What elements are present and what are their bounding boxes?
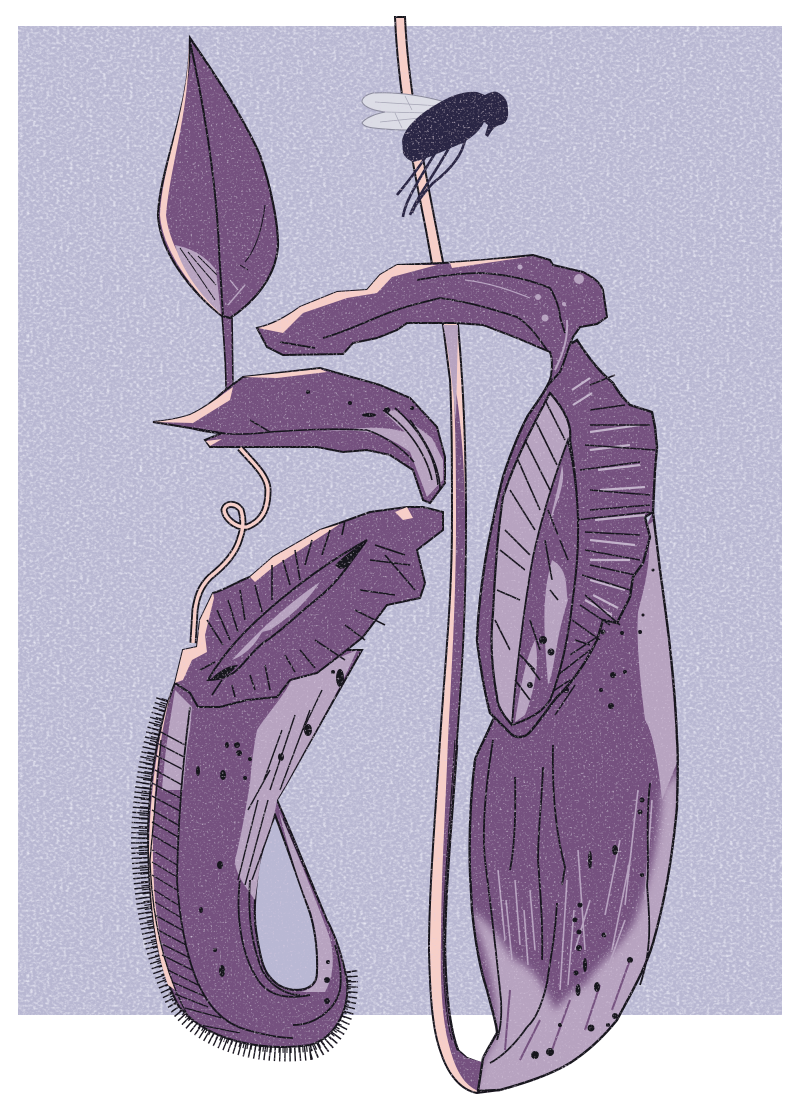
lid spots	[518, 264, 584, 322]
pitcher body	[148, 650, 362, 1047]
light fan at pitcher base	[470, 770, 680, 1100]
mouth	[208, 540, 367, 680]
hollow between twists	[255, 815, 317, 990]
pitcher body	[470, 512, 678, 1091]
plant artwork	[140, 17, 680, 1100]
peristome rim	[477, 340, 657, 737]
central stem	[395, 17, 500, 1093]
rim pink edge	[175, 507, 413, 683]
twist light band	[279, 812, 333, 992]
tendril	[193, 448, 268, 643]
peristome rim	[175, 507, 443, 707]
leaf midrib and hatching	[190, 42, 223, 316]
band hatching	[238, 690, 322, 885]
lower lid speckles	[306, 390, 414, 417]
wing veins	[375, 96, 440, 128]
rim highlights	[572, 378, 645, 615]
inner lines	[177, 707, 341, 1038]
lower lid light band	[317, 410, 443, 497]
fold lines	[484, 740, 650, 1063]
upper-left light patch	[162, 690, 192, 790]
pink edge strip	[149, 692, 175, 990]
top leaf	[158, 38, 278, 318]
leaf pink edge	[160, 44, 222, 315]
mouth inner wall	[512, 440, 578, 725]
light streak on right side	[637, 520, 678, 800]
lower lid lines	[190, 408, 440, 490]
body	[402, 92, 508, 162]
mouth outer	[492, 393, 578, 725]
body outline	[470, 512, 678, 1091]
purple streaks in fan	[505, 960, 630, 1060]
speckles	[531, 568, 654, 1059]
front light band	[235, 650, 357, 900]
mouth dark ends	[210, 541, 366, 680]
lid inner lines	[280, 273, 565, 350]
inner wall light patches	[515, 465, 568, 722]
speckles	[196, 669, 344, 1004]
mouth pale interior	[232, 582, 320, 660]
lower lid pink edge	[153, 369, 327, 446]
leaf light patch	[175, 245, 221, 314]
left band hatching	[150, 730, 240, 1033]
mouth dark hatching	[495, 400, 568, 700]
legs	[397, 140, 465, 217]
fly	[362, 92, 508, 217]
right pitcher	[470, 340, 680, 1100]
rim hatch lines	[540, 375, 655, 715]
leaf stem	[222, 315, 233, 390]
light hair lines	[498, 790, 652, 990]
lower lid	[153, 368, 445, 503]
lid pink edge	[258, 257, 527, 333]
rim hatch	[200, 520, 415, 697]
upper lid	[257, 255, 607, 383]
soft shading layers	[470, 520, 680, 1100]
wings	[362, 93, 457, 130]
left pitcher	[140, 507, 443, 1052]
hairy fringe	[140, 700, 349, 1052]
